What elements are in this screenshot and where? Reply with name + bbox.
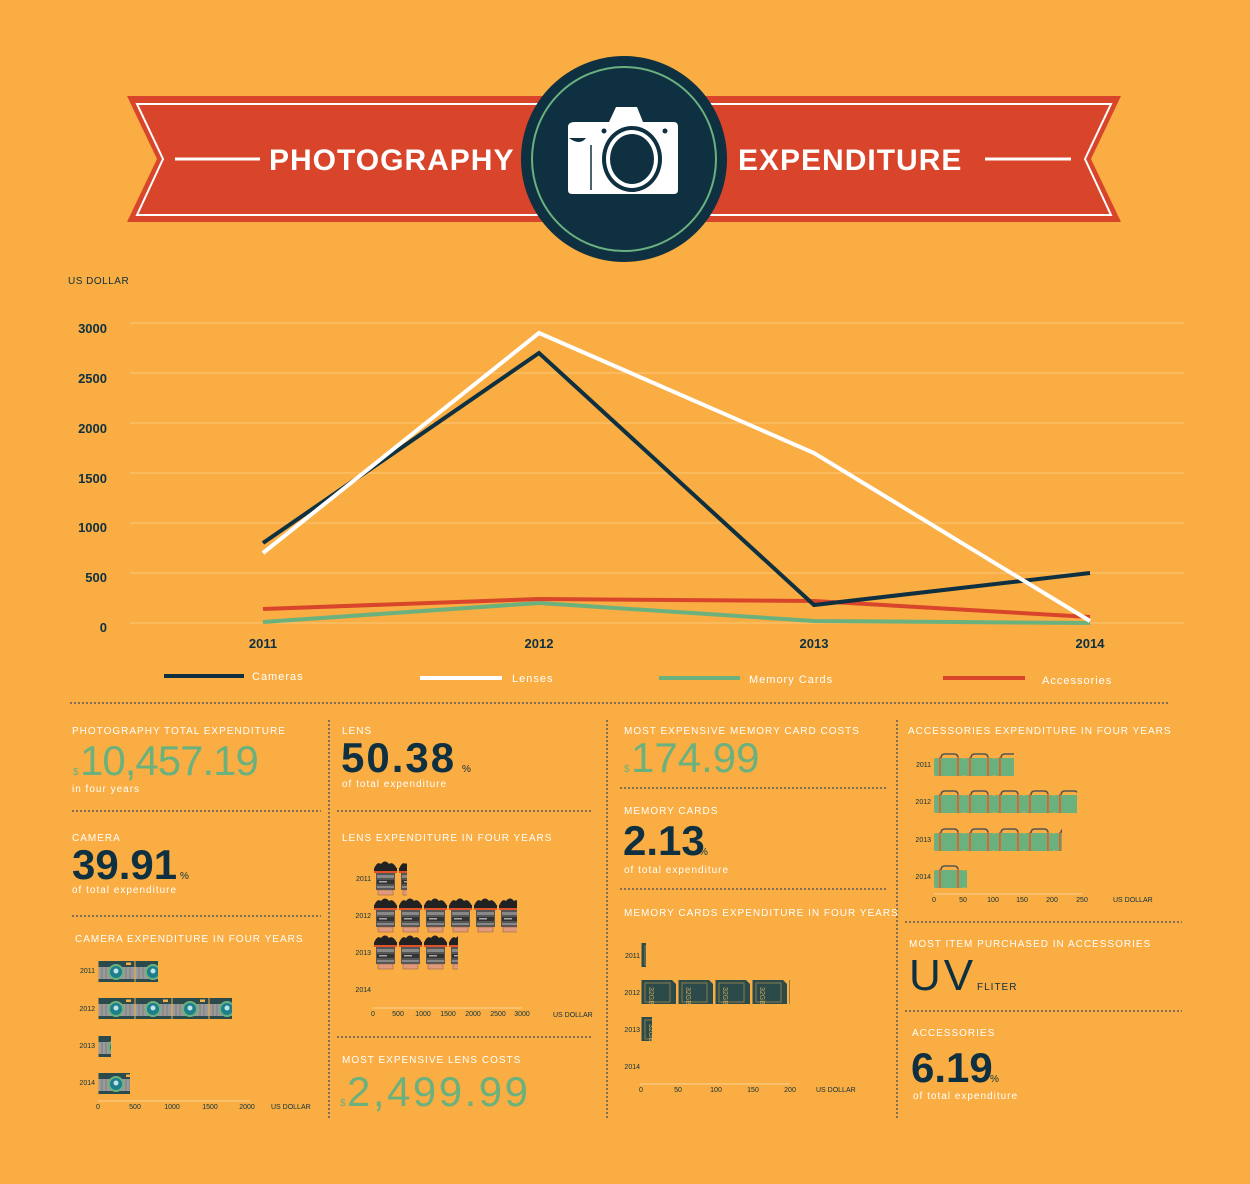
chart: accessories expenditure: 2013: [915, 837, 931, 844]
stat: total expenditure: $: [73, 767, 79, 778]
stat: most purchased accessory: [909, 939, 1151, 1000]
line chart: 500: [85, 570, 107, 585]
chart: lens expenditure: 2011: [356, 876, 371, 883]
line chart: US DOLLAR: [68, 276, 129, 287]
line chart: 2013: [800, 636, 828, 651]
chart: memory card expenditure: 100: [710, 1087, 722, 1094]
chart: accessories expenditure: 200: [1046, 897, 1058, 904]
chart: lens expenditure: 1500: [440, 1011, 456, 1018]
stat: total expenditure: [72, 726, 286, 795]
stat: lens share: [341, 726, 471, 790]
stat: most purchased accessory: UV: [909, 951, 976, 1000]
chart: memory card expenditure: 0: [639, 1087, 643, 1094]
chart: accessories expenditure: 250: [1076, 897, 1088, 904]
chart: lens expenditure: 2014: [355, 987, 371, 994]
chart: lens expenditure: [342, 833, 593, 1019]
chart: accessories expenditure: ACCESSORIES EXPENDITURE IN FOUR YEARS: [908, 726, 1172, 737]
chart: memory card expenditure: 2011: [625, 953, 640, 960]
stat: accessories share: %: [990, 1074, 999, 1085]
chart: camera expenditure: 1000: [164, 1104, 180, 1111]
chart: memory card expenditure: 50: [674, 1087, 682, 1094]
chart: camera expenditure: 500: [129, 1104, 141, 1111]
chart: lens expenditure: US DOLLAR: [553, 1012, 593, 1019]
stat: accessories share: [911, 1028, 1018, 1102]
chart: camera expenditure: CAMERA EXPENDITURE IN FOUR YEARS: [75, 934, 304, 945]
chart: camera expenditure: 2014: [79, 1080, 95, 1087]
stat: lens share: LENS: [342, 726, 372, 737]
title banner: [127, 56, 1121, 262]
stat: most expensive memory card: MOST EXPENSIVE MEMORY CARD COSTS: [624, 726, 860, 737]
stat: memory share: MEMORY CARDS: [624, 806, 718, 817]
line chart: 3000: [78, 321, 107, 336]
chart: accessories expenditure: 2012: [915, 799, 931, 806]
icon: camera medallion: [521, 56, 727, 262]
chart: lens expenditure: 2013: [355, 950, 371, 957]
chart: accessories expenditure: 50: [959, 897, 967, 904]
line chart: 2014: [1076, 636, 1105, 651]
chart: memory card expenditure: 150: [747, 1087, 759, 1094]
stat: memory share: %: [699, 847, 708, 858]
stat: memory share: [623, 806, 729, 876]
stat: camera share: CAMERA: [72, 833, 121, 844]
stat: most expensive lens: 2,499.99: [347, 1068, 530, 1115]
line chart: 0: [100, 620, 107, 635]
title text left: PHOTOGRAPHY: [269, 144, 514, 177]
legend: Memory Cards: [749, 674, 833, 686]
line chart: 2012: [525, 636, 553, 651]
line chart: 1500: [78, 471, 107, 486]
stat: camera share: 39.91: [72, 841, 177, 888]
chart: camera expenditure: 2000: [239, 1104, 255, 1111]
stat: camera share: [72, 833, 189, 896]
stat: accessories share: of total expenditure: [913, 1091, 1018, 1102]
stat: total expenditure: PHOTOGRAPHY TOTAL EXPENDITURE: [72, 726, 286, 737]
chart: accessories expenditure: 150: [1016, 897, 1028, 904]
chart: lens expenditure: 500: [392, 1011, 404, 1018]
chart: accessories expenditure: [908, 726, 1172, 904]
stat: memory share: 2.13: [623, 817, 705, 864]
legend: Cameras: [252, 671, 304, 683]
stat: most expensive memory card: 174.99: [631, 734, 759, 781]
chart: lens expenditure: 0: [371, 1011, 375, 1018]
stat: total expenditure: 10,457.19: [80, 737, 258, 784]
chart: lens expenditure: 3000: [514, 1011, 530, 1018]
stat: lens share: 50.38: [341, 734, 456, 781]
legend: Lenses: [512, 673, 553, 685]
chart: memory card expenditure: 200: [784, 1087, 796, 1094]
chart: accessories expenditure: US DOLLAR: [1113, 897, 1153, 904]
stat: lens share: %: [462, 764, 471, 775]
stat: most purchased accessory: MOST ITEM PURCHASED IN ACCESSORIES: [909, 939, 1151, 950]
chart: lens expenditure: 2012: [355, 913, 371, 920]
stat: camera share: of total expenditure: [72, 885, 177, 896]
chart: memory card expenditure: 2014: [624, 1064, 640, 1071]
line chart: 2011: [249, 636, 277, 651]
line chart: 2500: [78, 371, 107, 386]
line chart: 1000: [78, 520, 107, 535]
chart: camera expenditure: 1500: [202, 1104, 218, 1111]
stat: accessories share: ACCESSORIES: [912, 1028, 995, 1039]
chart: accessories expenditure: 100: [987, 897, 999, 904]
stat: most expensive lens: $: [340, 1098, 346, 1109]
chart: camera expenditure: 2011: [80, 968, 95, 975]
stat: accessories share: 6.19: [911, 1044, 993, 1091]
line chart: 2000: [78, 421, 107, 436]
chart: lens expenditure: LENS EXPENDITURE IN FOUR YEARS: [342, 833, 552, 844]
chart: lens expenditure: 1000: [415, 1011, 431, 1018]
chart: lens expenditure: 2500: [490, 1011, 506, 1018]
title text right: EXPENDITURE: [738, 144, 962, 177]
chart: lens expenditure: 2000: [465, 1011, 481, 1018]
chart: camera expenditure: 0: [96, 1104, 100, 1111]
chart: memory card expenditure: 2013: [624, 1027, 640, 1034]
legend: [164, 671, 1112, 687]
legend: Accessories: [1042, 675, 1112, 687]
chart: camera expenditure: 2012: [79, 1006, 95, 1013]
chart: camera expenditure: 2013: [79, 1043, 95, 1050]
chart: memory card expenditure: 2012: [624, 990, 640, 997]
stat: memory share: of total expenditure: [624, 865, 729, 876]
stat: most expensive memory card: $: [624, 764, 630, 775]
stat: most purchased accessory: FLITER: [977, 982, 1017, 993]
chart: camera expenditure: US DOLLAR: [271, 1104, 311, 1111]
chart: camera expenditure: [75, 934, 311, 1111]
chart: memory card expenditure: [624, 908, 899, 1094]
stat: most expensive memory card: [624, 726, 860, 781]
stat: lens share: of total expenditure: [342, 779, 447, 790]
chart: accessories expenditure: 2011: [916, 762, 931, 769]
stat: camera share: %: [180, 871, 189, 882]
chart: memory card expenditure: MEMORY CARDS EXPENDITURE IN FOUR YEARS: [624, 908, 899, 919]
chart: accessories expenditure: 2014: [915, 874, 931, 881]
line chart: [68, 276, 1184, 651]
chart: accessories expenditure: 0: [932, 897, 936, 904]
stat: total expenditure: in four years: [72, 784, 140, 795]
stat: most expensive lens: MOST EXPENSIVE LENS COSTS: [342, 1055, 521, 1066]
chart: memory card expenditure: US DOLLAR: [816, 1087, 856, 1094]
